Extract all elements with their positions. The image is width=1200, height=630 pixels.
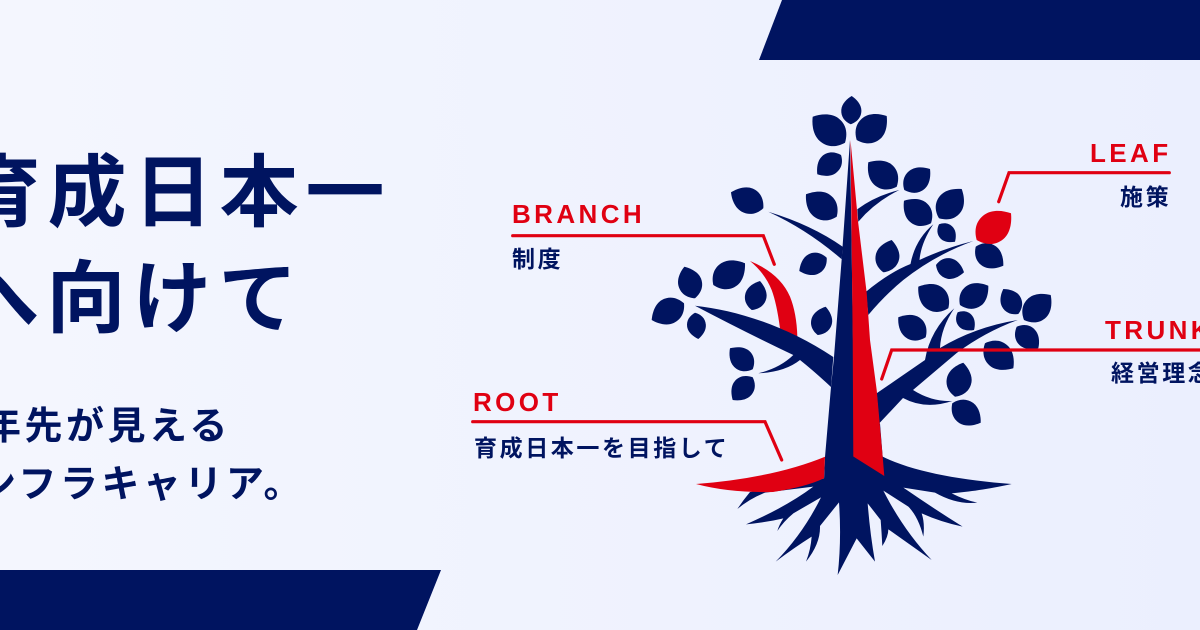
- top right navy band: [759, 0, 1200, 60]
- lower left branch: [695, 306, 833, 387]
- upper left branch: [768, 212, 843, 259]
- callout: root: ROOT: [473, 387, 562, 417]
- navy leaves: [646, 96, 1060, 433]
- callout: leaf: 施策: [1120, 178, 1171, 212]
- red trunk half: [850, 140, 884, 476]
- callout: root: [473, 387, 782, 463]
- lower right branch: [877, 308, 1018, 423]
- middle right branch: [866, 224, 973, 315]
- subtitle text: [0, 395, 305, 508]
- red leaf: [967, 201, 1021, 252]
- bottom left navy band: [0, 570, 441, 630]
- callout: trunk: [882, 315, 1200, 388]
- callout: branch: [512, 199, 774, 274]
- upper right small branch: [857, 190, 899, 222]
- callout: leaf: LEAF: [1090, 138, 1171, 168]
- callout: leaf: [999, 138, 1171, 212]
- roots: [737, 423, 1012, 575]
- red root: [696, 457, 825, 492]
- callout: branch: BRANCH: [512, 199, 645, 229]
- callout: root: 育成日本一を目指して: [474, 429, 729, 463]
- title heading: [0, 128, 392, 349]
- navy trunk: [824, 140, 855, 480]
- callout: branch: 制度: [512, 240, 563, 274]
- tree illustration: [646, 96, 1060, 575]
- red branch: [750, 261, 797, 337]
